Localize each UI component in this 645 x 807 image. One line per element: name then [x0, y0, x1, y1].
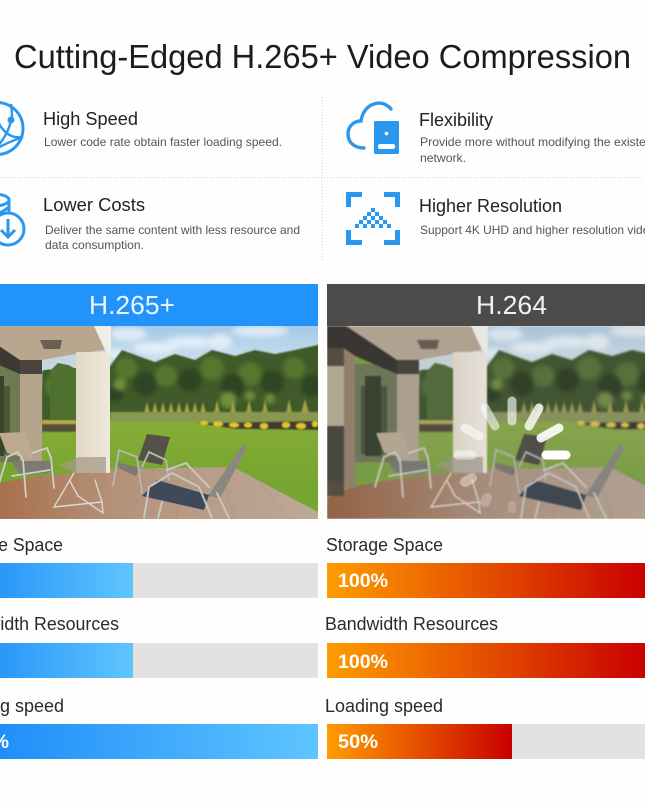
bar: storage space H.264: 100%	[338, 570, 388, 592]
label: storage space H.264: Storage Space	[326, 535, 443, 555]
photo: sharp patio	[0, 325, 323, 519]
bar: loading speed H.265+	[0, 724, 318, 759]
header label: H.264	[476, 290, 547, 320]
icon: loading spinner	[458, 401, 566, 509]
description: Deliver the same content with less resource and	[45, 223, 300, 237]
panel: H.264	[327, 284, 645, 519]
heading: High Speed	[43, 109, 138, 129]
panel: H.265+	[0, 284, 323, 519]
feature: higher resolution	[346, 192, 645, 245]
heading: Flexibility	[419, 110, 493, 130]
header bar	[0, 284, 318, 326]
bar: loading speed H.264: 50%	[338, 731, 378, 753]
title: Cutting-Edged H.265+ Video Compression	[14, 38, 631, 75]
feature: high speed	[0, 102, 282, 154]
heading: Lower Costs	[43, 195, 145, 215]
icon: cloud device	[348, 103, 399, 154]
description: Lower code rate obtain faster loading speed.	[44, 135, 282, 149]
description: data consumption.	[45, 238, 144, 252]
icon: storage with download arrow	[0, 194, 24, 245]
feature: lower costs	[0, 194, 300, 252]
heading: Higher Resolution	[419, 196, 562, 216]
icon: speed globe	[0, 102, 23, 154]
label: bandwidth resources H.264: Bandwidth Resources	[325, 614, 498, 634]
label: loading speed H.264: Loading speed	[325, 696, 443, 716]
description: network.	[420, 151, 466, 165]
bar: bandwidth H.264	[327, 643, 645, 678]
header label: H.265+	[89, 290, 175, 320]
bar: storage space H.265+	[0, 563, 318, 598]
feature: flexibility	[348, 103, 645, 165]
bar: storage space H.264	[327, 563, 645, 598]
photo: blurry patio	[327, 325, 645, 519]
bar: bandwidth H.265+	[0, 643, 318, 678]
bar: loading speed H.264	[327, 724, 645, 759]
header bar	[327, 284, 645, 326]
icon: resolution frame	[346, 192, 400, 245]
bar: bandwidth H.264: 100%	[338, 651, 388, 673]
